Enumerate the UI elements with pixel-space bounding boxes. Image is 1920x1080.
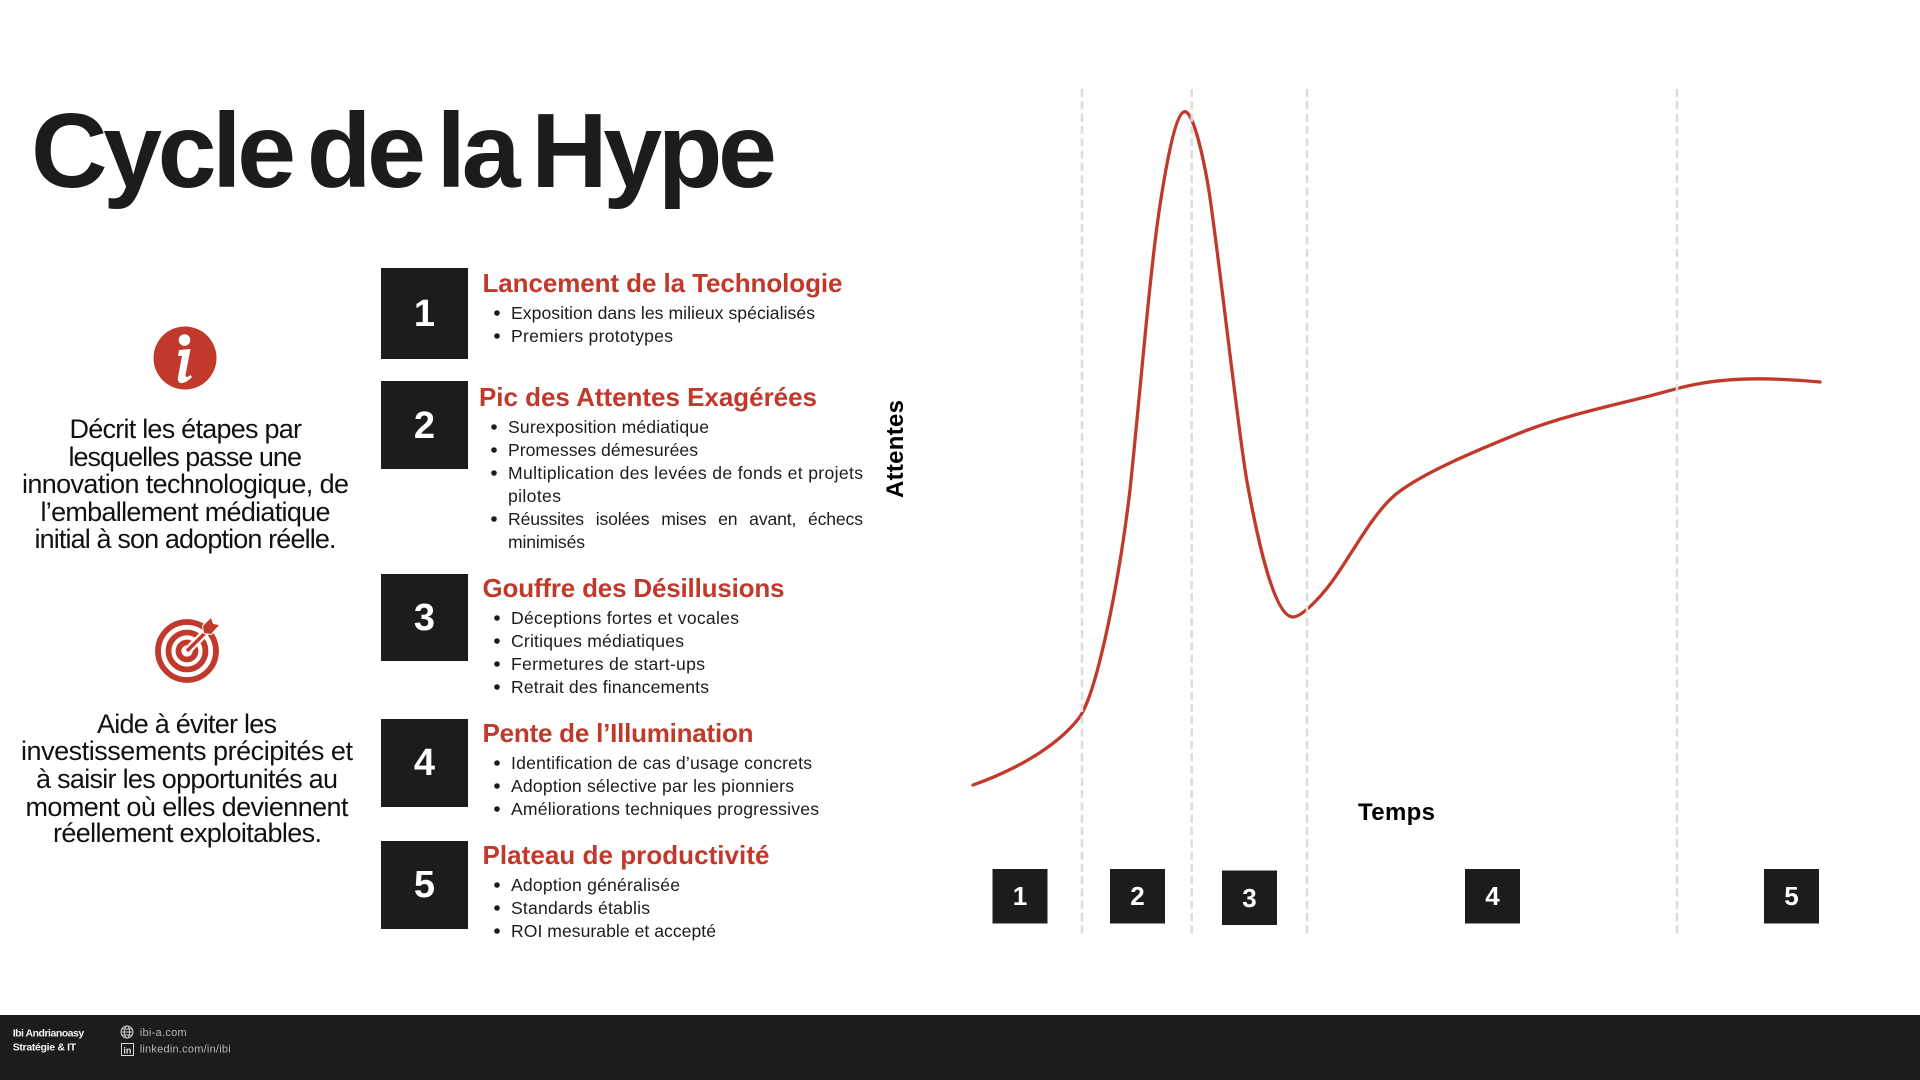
list 3: Déceptions fortes et vocales (511, 608, 739, 628)
author (13, 1028, 84, 1054)
author: Ibi Andrianoasy (13, 1028, 84, 1040)
list 4: Adoption sélective par les pionniers (511, 776, 794, 796)
list 2: pilotes (508, 486, 561, 506)
icon: globe (121, 1026, 133, 1038)
list 1 (494, 303, 815, 346)
number box 5 (381, 841, 468, 929)
list 1: Exposition dans les milieux spécialisés (511, 303, 815, 323)
phase marker 5: 5 (1784, 881, 1799, 911)
x axis label: Temps (1358, 799, 1435, 826)
number box 5: 5 (414, 864, 435, 906)
list 2: Promesses démesurées (508, 440, 698, 460)
title: Cycle de la Hype (31, 92, 777, 210)
list 1: Premiers prototypes (511, 326, 673, 346)
heading 1: Lancement de la Technologie (482, 268, 842, 298)
number box 2 (381, 381, 468, 469)
phase marker 4 (1465, 869, 1520, 924)
step 2 (381, 381, 863, 552)
list 2: Réussites isolées mises en avant, échecs (508, 509, 863, 529)
icon: linkedin: in (123, 1045, 131, 1055)
heading 4: Pente de l’Illumination (482, 718, 754, 748)
number box 4: 4 (414, 742, 435, 784)
phase marker 2: 2 (1130, 881, 1145, 911)
y axis label: Attentes (882, 400, 909, 498)
author: Stratégie & IT (13, 1042, 77, 1054)
list 5 (494, 875, 716, 941)
list 2: Multiplication des levées de fonds et projets (508, 463, 863, 483)
icon: linkedin (122, 1044, 134, 1056)
icon: target (158, 618, 219, 680)
number box 3 (381, 574, 468, 661)
heading 2: Pic des Attentes Exagérées (479, 382, 817, 412)
phase marker 1 (992, 869, 1048, 924)
text: benefit: Aide à éviter les (97, 709, 277, 739)
step 4 (381, 718, 819, 819)
text: description: innovation technologique, de (22, 469, 349, 499)
text: description (22, 414, 349, 554)
list 5: ROI mesurable et accepté (511, 921, 716, 941)
phase marker 4: 4 (1485, 881, 1500, 911)
phase marker 2 (1110, 869, 1165, 924)
heading 5: Plateau de productivité (482, 840, 770, 870)
text: benefit: investissements précipités et (21, 736, 353, 766)
text: description: l’emballement médiatique (40, 497, 330, 527)
icon: info (154, 326, 216, 390)
linkedin link: linkedin.com/in/ibi (140, 1044, 231, 1056)
text: description: initial à son adoption réelle. (34, 524, 336, 554)
list 3: Fermetures de start-ups (511, 654, 705, 674)
footer (0, 1015, 1920, 1080)
website link: ibi-a.com (140, 1027, 187, 1039)
number box 3: 3 (414, 597, 435, 639)
list 3: Critiques médiatiques (511, 631, 684, 651)
list 4 (494, 753, 819, 819)
list 4: Identification de cas d’usage concrets (511, 753, 812, 773)
list 4: Améliorations techniques progressives (511, 799, 819, 819)
list 5: Standards établis (511, 898, 650, 918)
phase marker 5 (1764, 869, 1819, 924)
heading 3: Gouffre des Désillusions (482, 573, 784, 603)
list 2: minimisés (508, 532, 585, 552)
number box 1: 1 (414, 293, 435, 335)
phase marker 3 (1222, 870, 1277, 925)
phase marker 3: 3 (1242, 883, 1257, 913)
number box 2: 2 (414, 405, 435, 447)
chart: hype cycle (882, 89, 1820, 936)
text: description: lesquelles passe une (68, 442, 302, 472)
list 3 (494, 608, 739, 697)
step 3 (381, 573, 784, 697)
list 5: Adoption généralisée (511, 875, 680, 895)
curve (973, 112, 1820, 785)
step 1 (381, 268, 842, 359)
list 2 (491, 417, 863, 552)
text: benefit (21, 709, 353, 848)
text: benefit: à saisir les opportunités au (36, 764, 338, 794)
panel: description (22, 326, 349, 554)
phase marker 1: 1 (1013, 881, 1027, 911)
text: benefit: moment où elles deviennent (26, 792, 349, 822)
text: description: Décrit les étapes par (70, 414, 302, 444)
list 2: Surexposition médiatique (508, 417, 709, 437)
step 5 (381, 840, 770, 941)
text: benefit: réellement exploitables. (53, 818, 322, 848)
panel: benefit (21, 618, 353, 848)
number box 1 (381, 268, 468, 359)
phase dividers (1082, 89, 1677, 936)
list 3: Retrait des financements (511, 677, 709, 697)
number box 4 (381, 719, 468, 807)
